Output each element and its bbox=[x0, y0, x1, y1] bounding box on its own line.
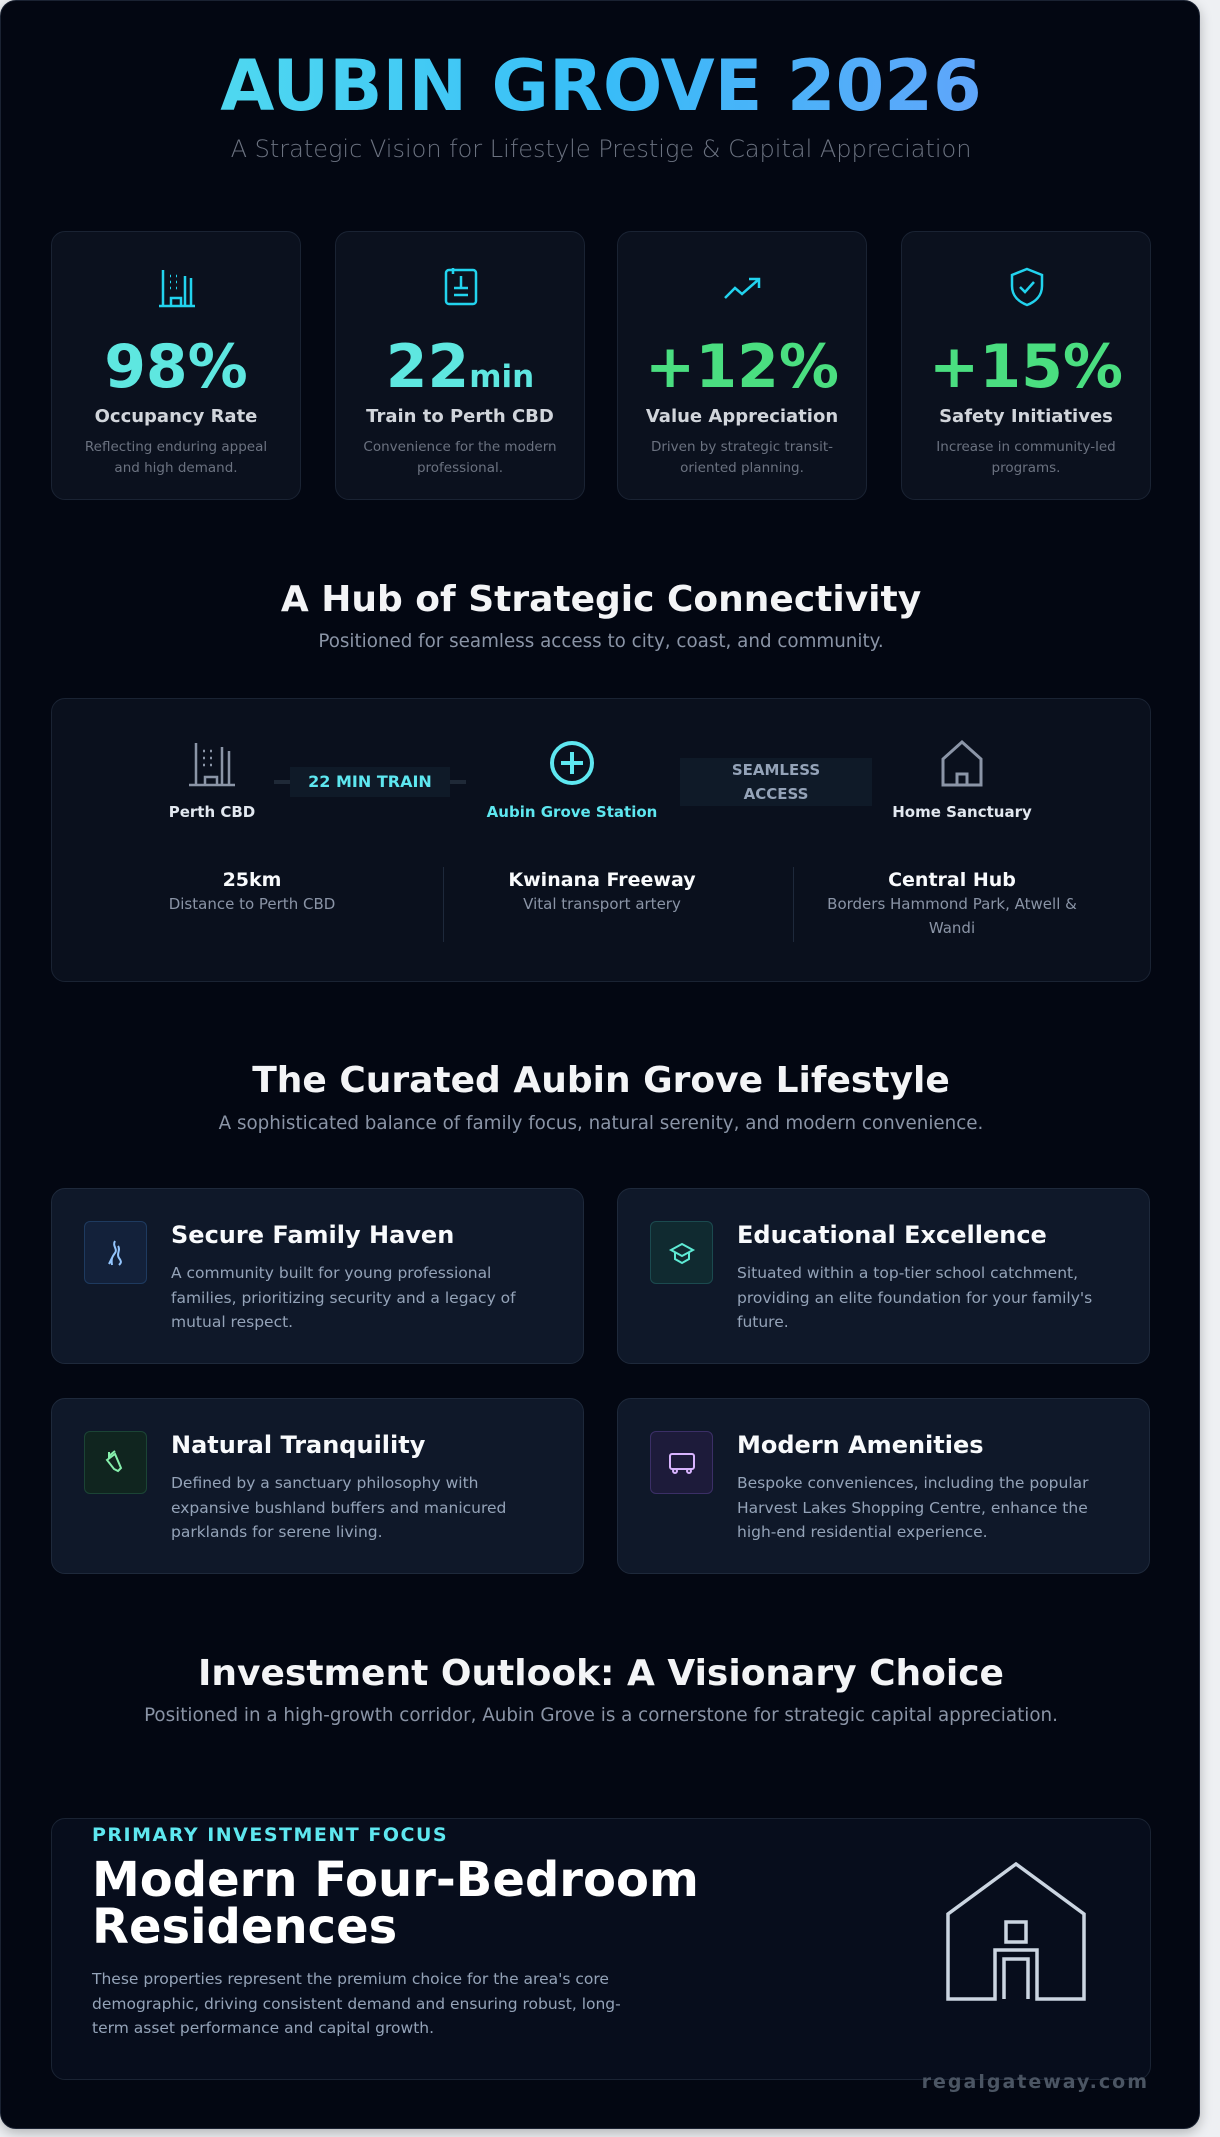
node: station: Aubin Grove Station bbox=[487, 803, 657, 821]
node: Perth CBD bbox=[169, 743, 255, 821]
footer: website: regalgateway.com bbox=[922, 2071, 1149, 2093]
stat card: train: 22min bbox=[386, 332, 534, 402]
connector: seamless access bbox=[680, 758, 872, 806]
connector: 22 min train bbox=[274, 767, 466, 797]
icon: house bbox=[946, 1862, 1086, 2001]
subtitle: connectivity: Positioned for seamless access to city, coast, and community. bbox=[318, 631, 884, 652]
stat card: safety bbox=[901, 231, 1151, 500]
fact: 25km bbox=[169, 869, 335, 913]
feature: education: Educational Excellence bbox=[737, 1221, 1047, 1249]
stat card: train: Train to Perth CBD bbox=[366, 406, 554, 427]
feature: nature: Defined by a sanctuary philosophy with expansive bushland buffers and manicured parklands for serene living. bbox=[171, 1474, 506, 1541]
subtitle: lifestyle: A sophisticated balance of family focus, natural serenity, and modern convenience. bbox=[219, 1113, 983, 1134]
panel: connectivity bbox=[51, 698, 1151, 982]
feature: nature: Natural Tranquility bbox=[171, 1431, 425, 1459]
fact: freeway bbox=[508, 869, 696, 913]
fact: freeway: Kwinana Freeway bbox=[508, 869, 696, 891]
feature: family: A community built for young professional families, prioritizing security and a legacy of mutual respect. bbox=[171, 1264, 516, 1331]
feature: family bbox=[51, 1188, 584, 1364]
headline: Residences bbox=[92, 1899, 397, 1955]
stat card: safety: +15% bbox=[929, 332, 1123, 402]
icon: trend bbox=[724, 278, 760, 299]
icon: building bbox=[159, 270, 195, 308]
fact: freeway: Vital transport artery bbox=[523, 895, 681, 913]
feature: nature bbox=[51, 1398, 584, 1574]
connector: 22 min train: 22 MIN TRAIN bbox=[308, 772, 432, 791]
panel: investment focus bbox=[51, 1818, 1151, 2080]
icon: clipboard bbox=[444, 268, 478, 306]
fact: central hub: Central Hub bbox=[888, 869, 1016, 891]
headline bbox=[92, 1852, 699, 1955]
description: These properties represent the premium choice for the area's core demographic, driving consistent demand and ensuring robust, long-term asset performance and capital growth. bbox=[92, 1970, 621, 2037]
icon: shield bbox=[1010, 268, 1044, 306]
connector: seamless access: ACCESS bbox=[744, 785, 808, 803]
feature: amenities bbox=[617, 1398, 1150, 1574]
stat card: value bbox=[617, 231, 867, 500]
stat card: train: Convenience for the modern professional. bbox=[363, 439, 557, 476]
stat card: safety: Increase in community-led programs. bbox=[936, 439, 1116, 476]
node: home bbox=[892, 740, 1032, 821]
heading: lifestyle: The Curated Aubin Grove Lifestyle bbox=[252, 1060, 950, 1101]
icon: graduation cap bbox=[650, 1221, 713, 1284]
feature: amenities: Bespoke conveniences, including the popular Harvest Lakes Shopping Centre, enhance the high-end residential experience. bbox=[737, 1474, 1089, 1541]
stat card: value: Driven by strategic transit-oriented planning. bbox=[651, 439, 833, 476]
headline: Modern Four-Bedroom bbox=[92, 1852, 699, 1908]
subtitle: A Strategic Vision for Lifestyle Prestige & Capital Appreciation bbox=[231, 135, 971, 163]
title: AUBIN GROVE 2026 bbox=[220, 45, 982, 127]
fact: central hub: Borders Hammond Park, Atwell & Wandi bbox=[827, 895, 1077, 937]
fact: 25km: Distance to Perth CBD bbox=[169, 895, 335, 913]
stat card: occupancy: Occupancy Rate bbox=[95, 406, 257, 427]
subtitle: investment: Positioned in a high-growth corridor, Aubin Grove is a cornerstone for strategic capital appreciation. bbox=[144, 1705, 1058, 1726]
node: home: Home Sanctuary bbox=[892, 803, 1032, 821]
feature: family: Secure Family Haven bbox=[171, 1221, 454, 1249]
heading: connectivity: A Hub of Strategic Connectivity bbox=[281, 579, 921, 620]
feature: education bbox=[617, 1188, 1150, 1364]
node: station bbox=[486, 741, 657, 821]
stat card: train bbox=[335, 231, 585, 500]
connector: seamless access: SEAMLESS bbox=[732, 761, 820, 779]
node: Perth CBD: Perth CBD bbox=[169, 803, 255, 821]
feature: education: Situated within a top-tier school catchment, providing an elite foundation for your family's future. bbox=[737, 1264, 1092, 1331]
icon: family bbox=[84, 1221, 147, 1284]
icon: cart bbox=[650, 1431, 713, 1494]
icon: tree bbox=[84, 1431, 147, 1494]
label: PRIMARY INVESTMENT FOCUS bbox=[92, 1824, 448, 1846]
stat card: occupancy: 98% bbox=[104, 332, 248, 402]
stat card: value: Value Appreciation bbox=[646, 406, 838, 427]
stat card: occupancy: Reflecting enduring appeal and high demand. bbox=[85, 439, 267, 476]
fact: 25km: 25km bbox=[223, 869, 281, 891]
stat card: safety: Safety Initiatives bbox=[939, 406, 1113, 427]
heading: investment: Investment Outlook: A Visionary Choice bbox=[198, 1653, 1004, 1694]
feature: amenities: Modern Amenities bbox=[737, 1431, 984, 1459]
stat card: value: +12% bbox=[645, 332, 839, 402]
stat card: occupancy bbox=[51, 231, 301, 500]
fact: central hub bbox=[827, 869, 1077, 937]
